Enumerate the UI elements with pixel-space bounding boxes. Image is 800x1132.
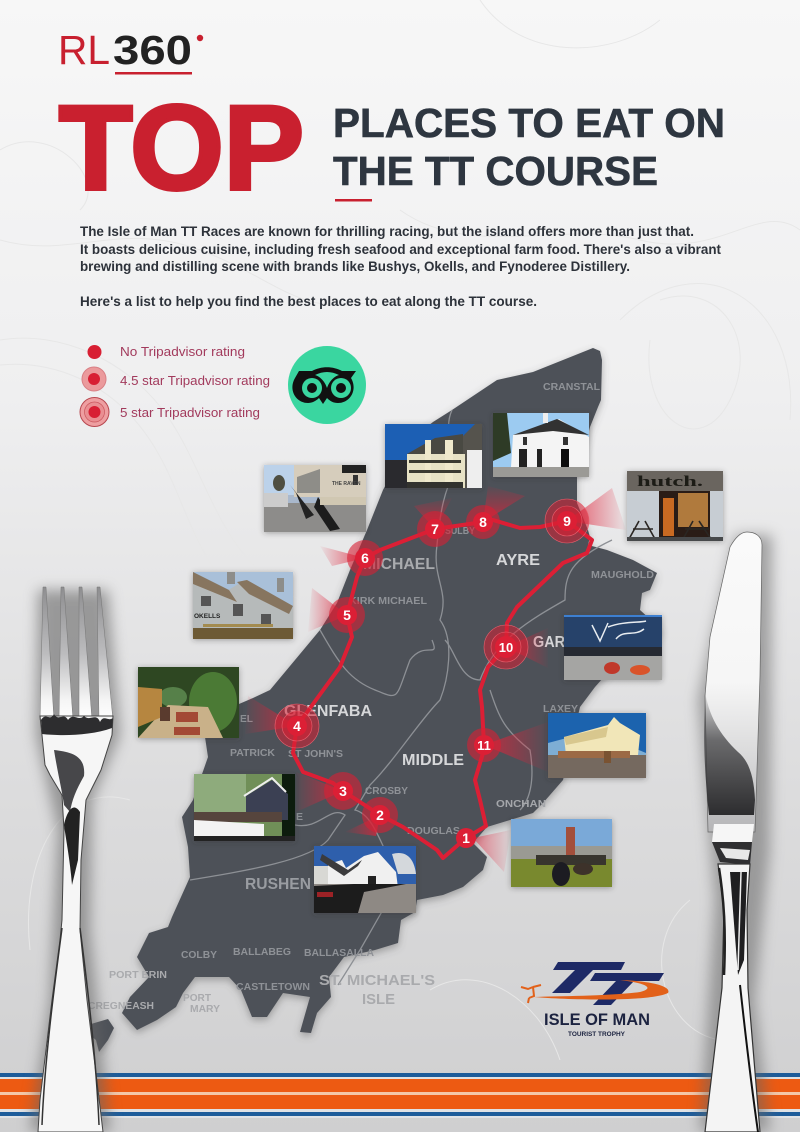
stop 8 [466,505,500,539]
place labels: MAUGHOLD [591,569,654,581]
logo: Isle of Man TT: ISLE OF MAN [544,1010,650,1029]
stop 3 [324,772,362,810]
legend [80,344,270,426]
place labels: CREGNEASH [88,1000,154,1012]
photo: stop 3 [190,772,298,842]
place labels [88,381,654,1015]
logo: Isle of Man TT [521,962,668,1038]
stop 3: 3 [339,783,347,799]
photo: white house [492,413,592,482]
photo: pub at stop 11 [548,710,650,782]
photo: The Raven [260,462,370,536]
place labels: EL [240,713,254,725]
heading [333,100,725,194]
fork [30,587,120,1132]
stop 5: 5 [343,607,351,623]
legend: 4.5 star Tripadvisor rating [120,373,270,388]
place labels: MICHAEL [363,556,435,573]
place labels: LAXEY [543,703,578,715]
place labels: COLBY [181,949,217,961]
title: TOP: TOP [59,81,304,215]
fork shadow [30,590,120,1132]
place labels: MARY [190,1003,220,1015]
stop 5 [329,597,365,633]
legend: 5 star Tripadvisor rating [120,405,260,420]
logo: Isle of Man TT: TOURIST TROPHY [568,1031,626,1038]
photo: stop 1 grandstand [508,816,616,892]
fork head [38,716,113,1132]
stop markers [275,499,589,848]
place labels: PORT [183,992,212,1004]
stop 8: 8 [479,514,487,530]
photo: Okells pub: OKELLS [194,613,221,620]
place labels: ST JOHN'S [288,748,343,760]
place labels: GLENFABA [284,703,372,720]
place labels: ST. MICHAEL'S [319,972,435,989]
place labels: SULBY [445,525,475,537]
heading: THE TT COURSE [333,148,658,194]
place labels: DOUGLAS [407,825,460,837]
stop 9 [545,499,589,543]
stop 10: 10 [499,640,513,655]
photo: Okells pub [190,570,296,644]
intro text: brewing and distilling scene with brands like Bushys, Okells, and Fynoderee Distillery. [80,259,630,274]
intro text: The Isle of Man TT Races are known for thrilling racing, but the island offers more than just that. [80,224,694,239]
photo: hotel [382,422,482,492]
knife shadow [698,535,772,1132]
photo: Victory Cafe [560,612,666,684]
legend: No Tripadvisor rating [120,344,245,359]
heading: PLACES TO EAT ON [333,100,725,146]
place labels: E [296,811,303,823]
logo: RL360: RL [58,27,110,73]
knife [698,532,772,1132]
stop 11 [467,728,501,762]
place labels: CRANSTAL [543,381,601,393]
stop 7: 7 [431,521,439,537]
photo beams [245,486,626,872]
place labels: PATRICK [230,747,275,759]
blade [705,532,762,832]
intro text: It boasts delicious cuisine, including fresh seafood and exceptional farm food. There's also a vibrant [80,242,721,257]
place labels: ONCHAN [496,798,546,810]
stop 11: 11 [477,738,491,753]
handle [705,864,760,1132]
photo: The Hutch [624,468,726,546]
place labels: CROSBY [365,785,408,797]
bolster [712,824,754,842]
place labels: BALLASALLA [304,947,374,959]
place labels: ISLE [362,991,395,1008]
intro text: Here's a list to help you find the best places to eat along the TT course. [80,294,537,309]
map: Isle of Man [88,348,662,1052]
stop 10 [484,625,528,669]
stop 2 [362,797,398,833]
place labels: KIRK MICHAEL [349,595,428,607]
stop 6 [347,540,383,576]
photo: The Raven: THE RAVEN [332,481,361,487]
stripes [0,1073,800,1118]
tines [40,587,113,720]
stop 9: 9 [563,513,571,529]
photo: The Hutch: hutch. [637,474,703,490]
stop 4 [275,704,319,748]
roads [190,410,612,985]
place labels: PORT ERIN [109,969,167,981]
place labels: CASTLETOWN [236,981,310,993]
place labels: AYRE [496,552,540,569]
photo: stop 2 [311,844,420,918]
place labels: GAR [533,634,565,651]
place labels: RUSHEN [245,876,311,893]
intro text [80,224,721,309]
stop 1: 1 [462,830,470,846]
stop 6: 6 [361,550,369,566]
place labels: BALLABEG [233,946,291,958]
photo: terrace [134,664,242,742]
stop 1 [456,828,476,848]
stop 2: 2 [376,807,384,823]
logo: RL360: 360 [113,27,192,73]
place labels: MIDDLE [402,752,464,769]
TT course route [293,520,592,858]
stop 4: 4 [293,718,301,734]
icon: Tripadvisor owl [288,346,366,424]
island outline [91,348,662,1052]
logo: RL360 [58,27,203,74]
stop 7 [417,511,453,547]
